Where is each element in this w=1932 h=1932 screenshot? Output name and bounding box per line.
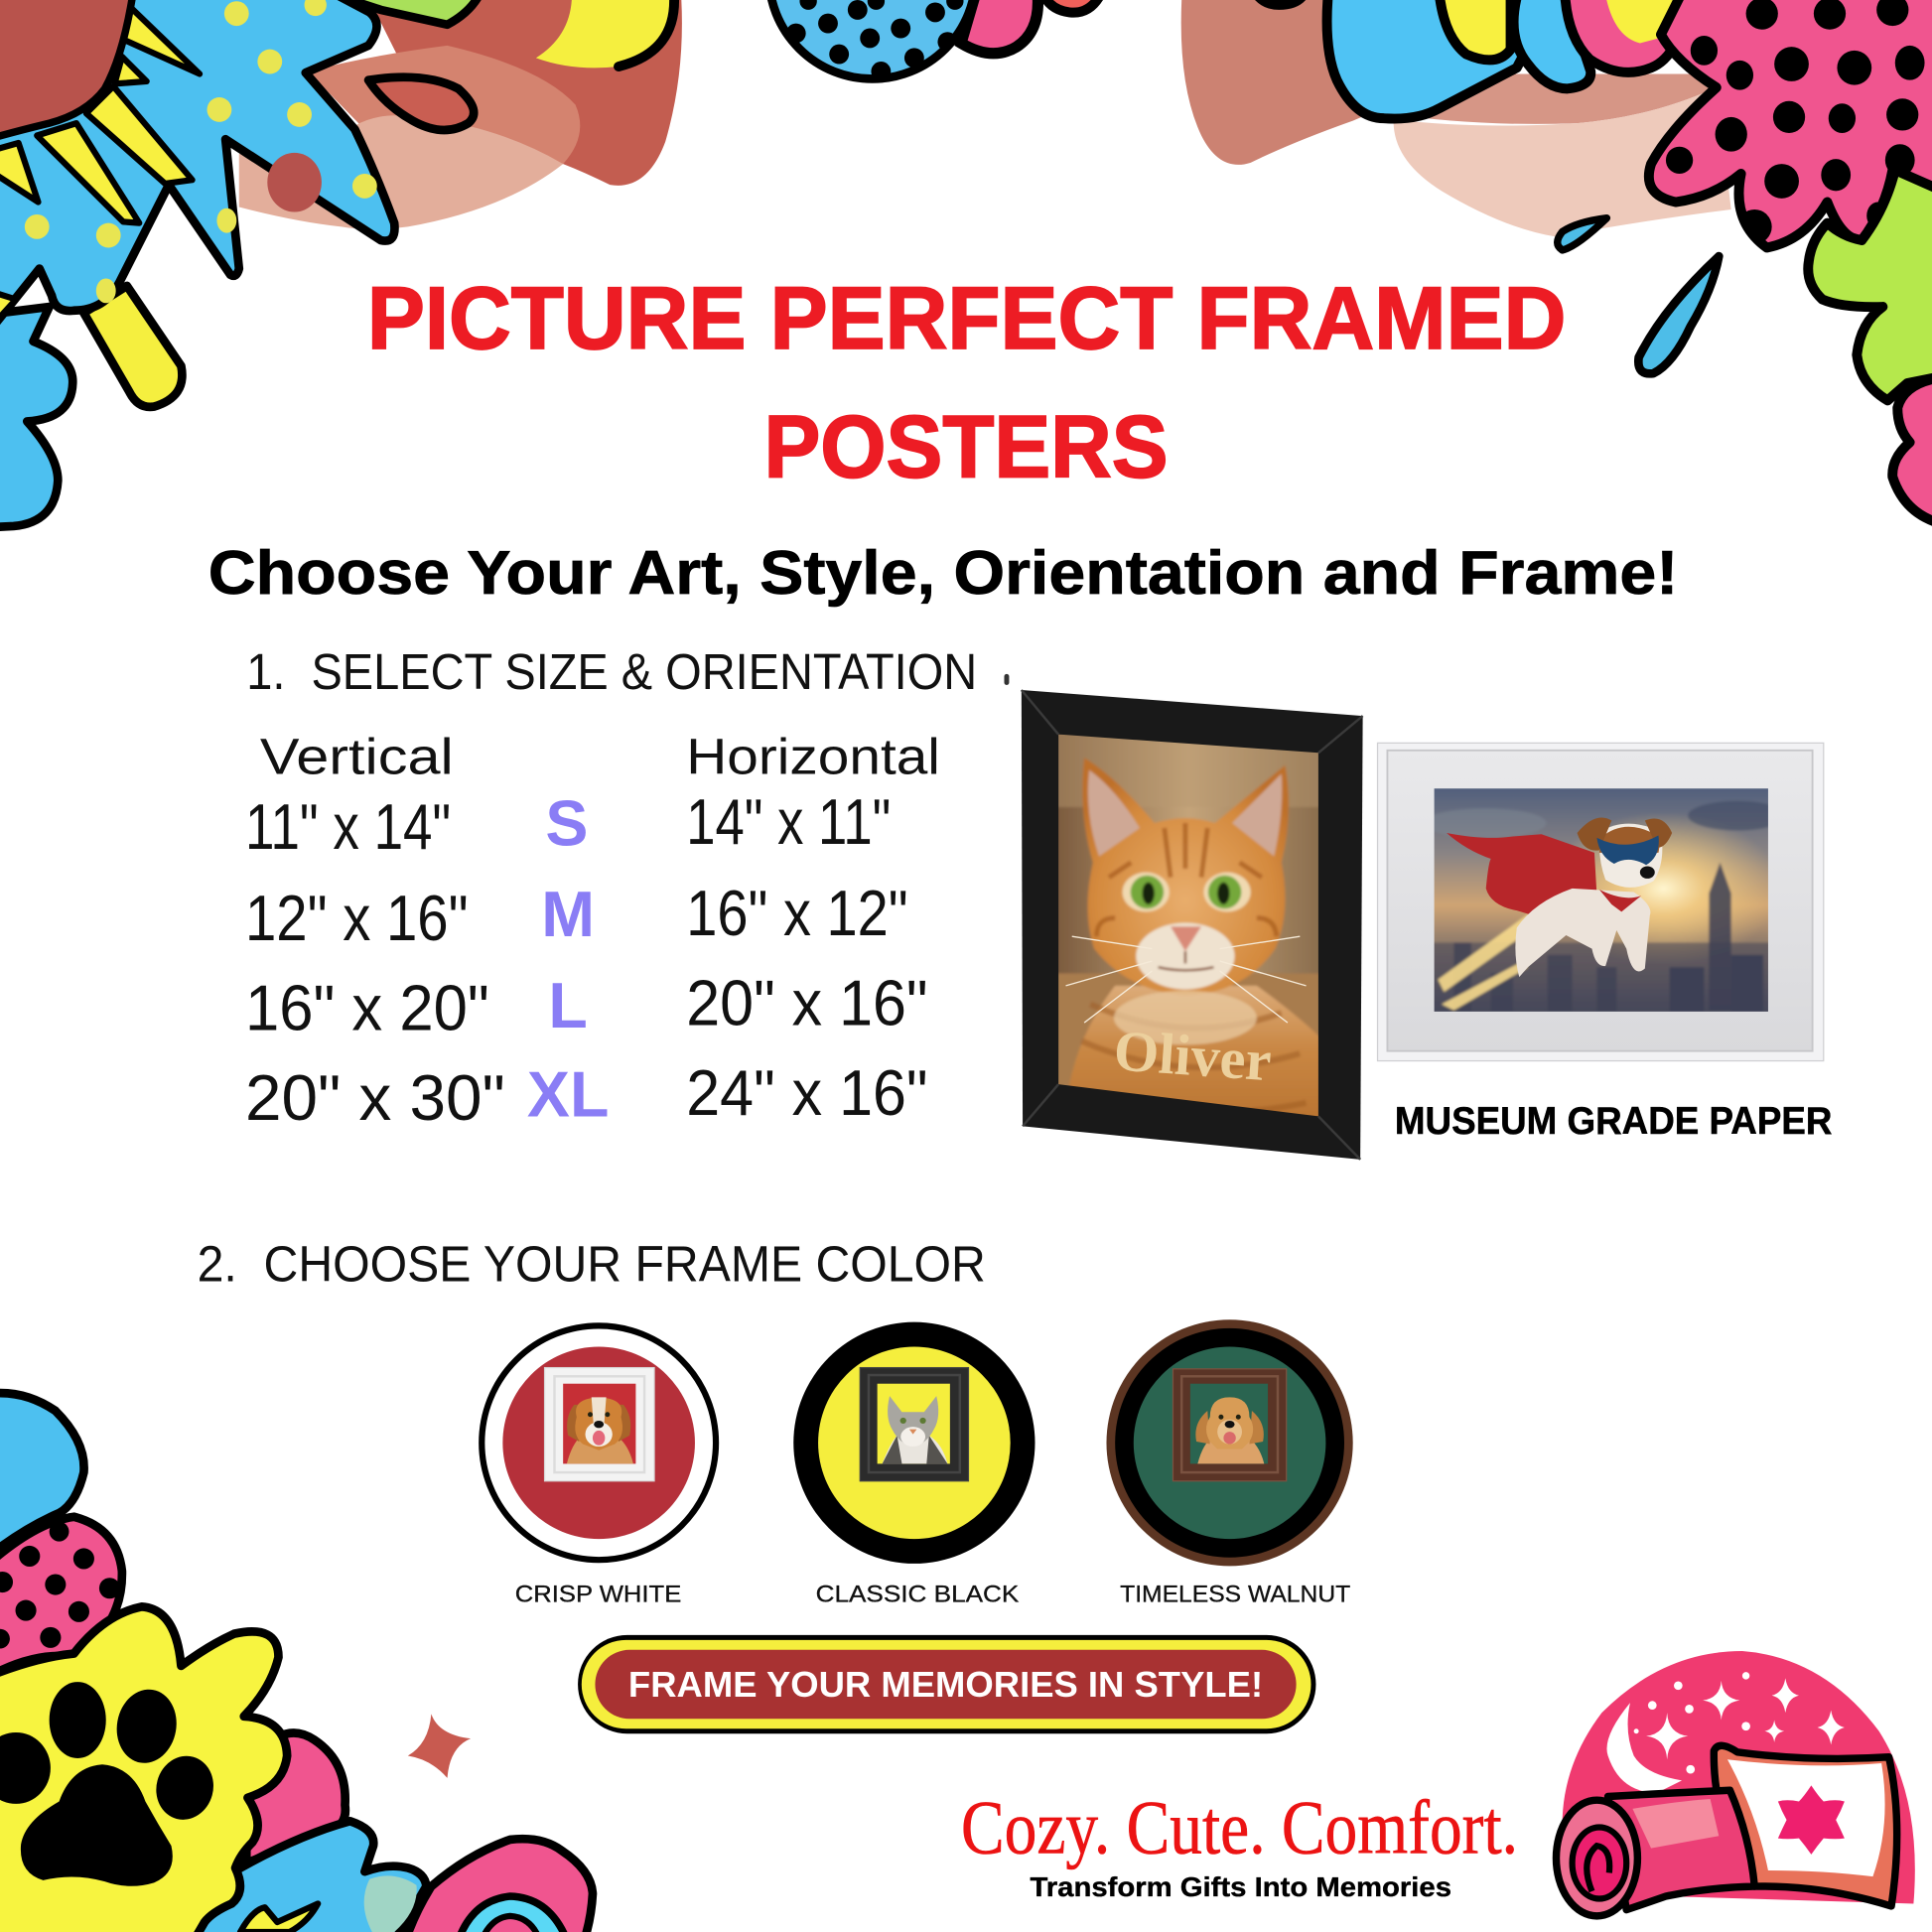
frame option labels	[515, 1581, 1350, 1606]
brown blob	[0, 0, 133, 138]
column header: horizontal: Horizontal	[686, 728, 940, 784]
paw print	[0, 1682, 220, 1886]
size letters: XL	[527, 1058, 609, 1130]
nose	[1640, 866, 1655, 879]
horizontal sizes	[686, 786, 928, 1129]
stars	[1634, 1672, 1845, 1774]
blue lobe small	[1514, 0, 1590, 88]
dog body	[1515, 889, 1650, 977]
dog head	[1599, 824, 1662, 888]
size letters: M	[541, 879, 595, 950]
decoration: top-right splash	[1181, 0, 1932, 522]
pink dome	[1563, 1651, 1915, 1903]
blue lobe large	[1327, 0, 1553, 119]
caption: paper: MUSEUM GRADE PAPER	[1395, 1100, 1832, 1143]
title	[367, 268, 1566, 495]
walnut frame	[1173, 1369, 1287, 1481]
blue splat	[0, 0, 394, 331]
green lobe	[328, 0, 481, 25]
decoration: top-left splash	[0, 0, 682, 527]
size table	[245, 728, 940, 1134]
yellow drip	[83, 286, 182, 407]
terracotta paint layers	[1181, 0, 1731, 236]
brand wordmark	[961, 1785, 1518, 1902]
black dots	[1666, 0, 1925, 244]
frame option: crisp white	[482, 1325, 716, 1560]
white frame and mat	[1378, 743, 1824, 1061]
cape	[1447, 833, 1596, 914]
cat portrait	[1058, 735, 1318, 1116]
superhero dog artwork	[1434, 788, 1768, 1012]
frame option labels: TIMELESS WALNUT	[1120, 1581, 1350, 1606]
vertical sizes	[245, 791, 505, 1134]
decoration: bottom-left splash with paw	[0, 1393, 593, 1932]
vertical sizes: 20" x 30"	[245, 1062, 505, 1134]
yellow lobe	[1440, 0, 1511, 60]
terracotta paint layers	[239, 0, 682, 229]
title line 1: PICTURE PERFECT FRAMED	[367, 268, 1566, 367]
swirl rings	[460, 1896, 566, 1932]
yellow dots	[25, 0, 377, 303]
blue lower lobe	[0, 307, 72, 527]
step 1 heading: 1. SELECT SIZE & ORIENTATION	[246, 643, 977, 700]
black frame	[1022, 690, 1363, 1160]
moon	[1606, 1703, 1682, 1793]
title line 2: POSTERS	[763, 396, 1169, 495]
horizontal sizes: 20" x 16"	[686, 968, 928, 1039]
brown dot	[267, 153, 322, 211]
swatch circle	[793, 1322, 1035, 1564]
brand logo: blanket, pillow and night sky	[1556, 1651, 1915, 1916]
vertical sizes: 11" x 14"	[245, 791, 451, 863]
blanket roll	[1556, 1790, 1754, 1916]
frame option labels: CLASSIC BLACK	[816, 1581, 1020, 1606]
golden retriever portrait	[1195, 1397, 1264, 1463]
salmon lobe	[1042, 0, 1102, 13]
swatch circle	[482, 1325, 716, 1560]
blue circle	[0, 1393, 84, 1555]
frame option labels: CRISP WHITE	[515, 1581, 681, 1606]
horizontal sizes: 14" x 11"	[686, 786, 891, 858]
swatch circle	[1106, 1319, 1353, 1566]
frame option: timeless walnut	[1106, 1319, 1353, 1566]
pillow star	[1778, 1785, 1845, 1855]
teardrop outline	[368, 77, 474, 130]
scarf	[1599, 890, 1641, 911]
black framed cat poster	[1022, 690, 1363, 1160]
city skyline	[1430, 863, 1774, 1017]
large blue drop	[1638, 256, 1719, 373]
pink dotted blob	[1649, 0, 1932, 247]
small blue drop	[1558, 218, 1606, 250]
pink lower blob	[1892, 378, 1932, 522]
pink dotted lobe	[0, 1517, 122, 1676]
yellow spikes	[0, 7, 200, 326]
swirl centre	[483, 1916, 538, 1932]
frame option: classic black	[793, 1322, 1035, 1564]
size letters: S	[545, 787, 588, 859]
green blob	[1808, 170, 1932, 400]
small yellow leaf	[240, 1903, 318, 1932]
black arc on yellow lobe	[619, 0, 674, 67]
pink swirl	[407, 1839, 593, 1932]
pink lobe right	[246, 1732, 345, 1863]
blue ball	[768, 0, 976, 78]
white framed superhero dog poster	[1378, 743, 1824, 1061]
blue mask	[1596, 835, 1659, 865]
vertical sizes: 16" x 20"	[245, 973, 489, 1044]
brand name: Cozy. Cute. Comfort.	[961, 1785, 1518, 1870]
yellow inner lobe	[1605, 0, 1678, 43]
size letters: L	[548, 970, 588, 1041]
light streaks	[1438, 914, 1535, 1011]
tagline: Transform Gifts Into Memories	[1031, 1871, 1451, 1902]
step 2 heading: 2. CHOOSE YOUR FRAME COLOR	[198, 1236, 986, 1293]
horizontal sizes: 24" x 16"	[686, 1057, 928, 1129]
terracotta star	[408, 1714, 471, 1778]
beagle portrait	[567, 1397, 633, 1463]
subheading: Choose Your Art, Style, Orientation and Frame!	[208, 539, 1678, 608]
banner text: FRAME YOUR MEMORIES IN STYLE!	[628, 1664, 1263, 1705]
size letters	[527, 787, 609, 1130]
pink lobes	[961, 0, 1037, 54]
black dots	[786, 0, 964, 81]
banner button	[578, 1635, 1315, 1733]
pink lobe	[1565, 0, 1688, 72]
yellow paw blob	[0, 1606, 287, 1932]
column header: vertical: Vertical	[260, 728, 454, 784]
black smudge	[1252, 0, 1309, 10]
horizontal sizes: 16" x 12"	[686, 878, 908, 949]
white frame	[545, 1368, 654, 1481]
yellow lobe	[536, 0, 674, 68]
small mark	[1004, 674, 1009, 685]
black frame	[860, 1368, 968, 1481]
cat name: Oliver	[1112, 1018, 1274, 1093]
cat portrait	[883, 1396, 947, 1463]
pillow	[1714, 1745, 1897, 1906]
vertical sizes: 12" x 16"	[245, 883, 469, 954]
teal patch	[364, 1875, 417, 1932]
blue lower lobe	[191, 1821, 426, 1932]
decoration: top-centre dotted ball	[768, 0, 1102, 81]
black dots	[0, 1522, 120, 1649]
